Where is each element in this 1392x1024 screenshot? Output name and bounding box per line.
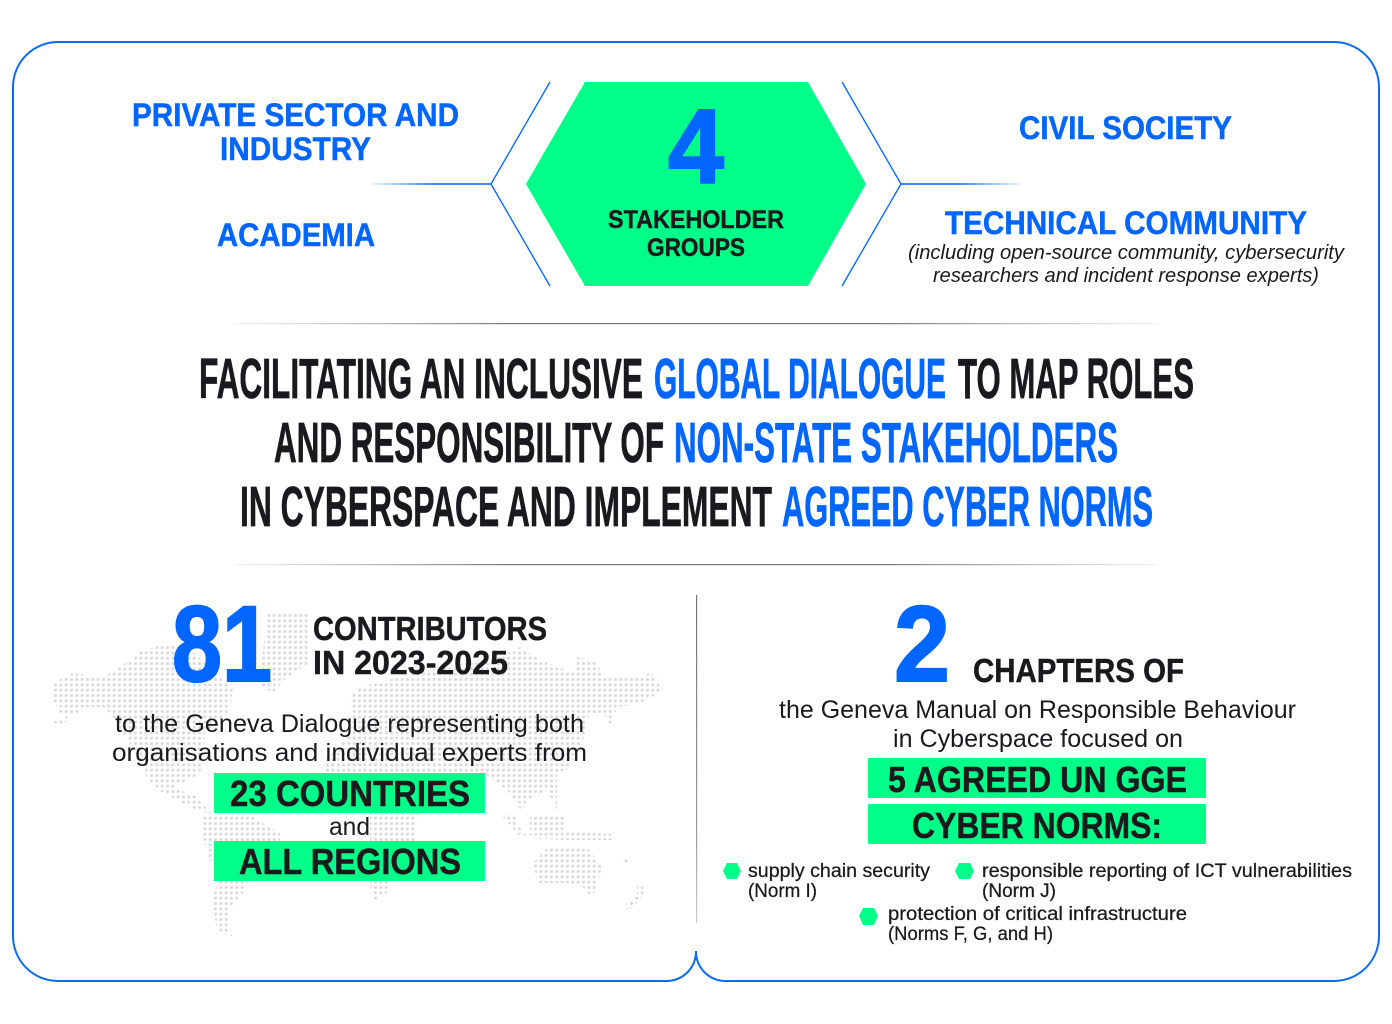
label: private sector and industry <box>132 97 459 167</box>
hexagon caption <box>608 206 784 262</box>
label: private sector and industry: PRIVATE SECTOR AND <box>132 97 459 133</box>
contributors heading <box>313 610 547 681</box>
highlight: cyber norms: CYBER NORMS: <box>912 805 1162 846</box>
headline: GLOBAL DIALOGUE <box>654 347 946 411</box>
highlight: all regions: ALL REGIONS <box>239 841 461 882</box>
label: technical community: TECHNICAL COMMUNITY <box>945 205 1307 241</box>
contributors description: organisations and individual experts from <box>112 739 587 767</box>
panel: contributors <box>53 583 665 936</box>
norm: responsible reporting: responsible reporting of ICT vulnerabilities <box>982 861 1352 882</box>
central hexagon <box>526 82 866 286</box>
technical community note: (including open-source community, cybersecurity <box>908 242 1345 264</box>
hexagon caption: STAKEHOLDER <box>608 206 784 234</box>
technical community note <box>908 242 1345 287</box>
label: private sector and industry: INDUSTRY <box>220 131 371 167</box>
highlight: 5 agreed UN GGE: 5 AGREED UN GGE <box>888 759 1187 800</box>
label: civil society: CIVIL SOCIETY <box>1019 110 1232 146</box>
norm: critical infrastructure: (Norms F, G, and H) <box>888 924 1053 945</box>
dotted world map <box>53 613 665 936</box>
contributors description: to the Geneva Dialogue representing both <box>115 710 584 738</box>
norm: responsible reporting <box>955 861 1352 902</box>
hexagon caption: GROUPS <box>647 234 745 262</box>
headline: AND RESPONSIBILITY OF <box>274 411 664 475</box>
norm: supply chain security: (Norm I) <box>748 881 817 902</box>
contributors description <box>112 710 587 767</box>
norm: critical infrastructure: protection of critical infrastructure <box>888 904 1187 925</box>
chapters description: in Cyberspace focused on <box>893 725 1183 753</box>
norm: supply chain security <box>723 861 931 902</box>
norm: critical infrastructure <box>859 904 1187 945</box>
chapters heading: CHAPTERS OF <box>973 652 1184 689</box>
highlight: 23 countries: 23 COUNTRIES <box>230 773 470 814</box>
headline: IN CYBERSPACE AND IMPLEMENT <box>240 475 772 539</box>
contributors heading: CONTRIBUTORS <box>313 610 547 647</box>
norm: responsible reporting: (Norm J) <box>982 881 1056 902</box>
chapters description: the Geneva Manual on Responsible Behaviour <box>779 696 1296 724</box>
chapters description <box>779 696 1296 753</box>
panel: stakeholder groups <box>132 82 1345 287</box>
word: and: and <box>329 813 370 841</box>
contributors heading: IN 2023-2025 <box>313 644 508 681</box>
norm: supply chain security: supply chain security <box>748 861 931 882</box>
number 4: 4 <box>668 88 724 206</box>
technical community note: researchers and incident response experts) <box>933 265 1319 287</box>
headline: FACILITATING AN INCLUSIVE <box>199 347 643 411</box>
right bracket connector <box>842 82 1020 286</box>
headline <box>199 347 1194 539</box>
number 2: 2 <box>894 583 950 704</box>
label: academia: ACADEMIA <box>217 217 375 253</box>
panel: chapters <box>723 583 1352 945</box>
headline: TO MAP ROLES <box>958 347 1194 411</box>
left bracket connector <box>372 82 550 286</box>
number 81: 81 <box>172 583 272 704</box>
